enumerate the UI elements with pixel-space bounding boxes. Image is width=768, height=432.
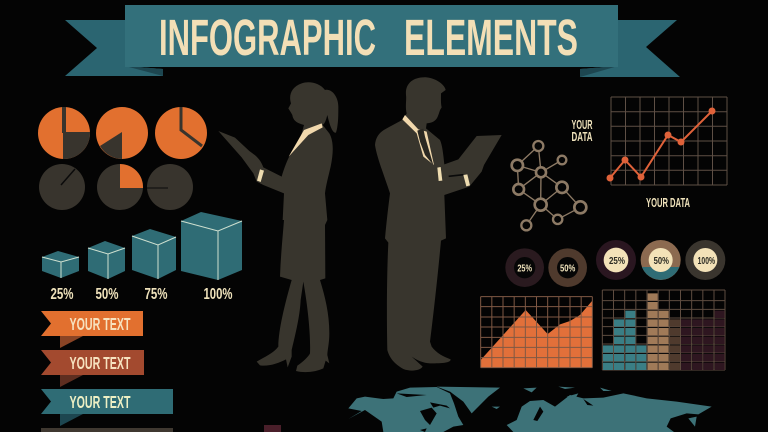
pie charts bbox=[38, 107, 207, 210]
y axis label: DATA bbox=[572, 129, 593, 144]
3D cubes bbox=[42, 212, 242, 303]
cube labels: 75% bbox=[144, 286, 168, 303]
Baltic sea bbox=[533, 399, 593, 421]
right banner fold bbox=[580, 66, 618, 77]
cube labels: 100% bbox=[204, 286, 232, 303]
man tie bbox=[417, 129, 433, 165]
man pen bbox=[449, 175, 463, 176]
left banner fold bbox=[125, 66, 163, 76]
right banner tail bbox=[580, 20, 680, 77]
x axis label: YOUR DATA bbox=[646, 196, 690, 210]
ribbon 2: YOUR TEXT bbox=[70, 353, 131, 373]
pie 5 bbox=[97, 164, 143, 210]
left banner tail bbox=[65, 20, 163, 76]
pie 4 bbox=[39, 164, 85, 210]
man silhouette bbox=[375, 77, 502, 371]
cube 100% bbox=[181, 212, 242, 280]
partial red square bbox=[264, 425, 281, 432]
cube 25% bbox=[42, 251, 79, 278]
donut 50% dark bbox=[548, 248, 587, 287]
silhouettes bbox=[218, 77, 502, 372]
title banner bbox=[65, 5, 680, 77]
area chart grid bbox=[481, 297, 592, 368]
bar chart grid bbox=[602, 290, 725, 370]
North America bbox=[348, 387, 463, 432]
donut 50% dark: 50% bbox=[560, 264, 575, 275]
line series bbox=[610, 111, 712, 178]
ribbon 1: YOUR TEXT bbox=[70, 314, 131, 334]
cube labels: 25% bbox=[50, 286, 74, 303]
area chart bbox=[481, 297, 592, 368]
title text: INFOGRAPHIC bbox=[159, 9, 376, 66]
cube labels: 50% bbox=[96, 286, 118, 303]
pie 6 bbox=[147, 164, 193, 210]
donut 25% light: 25% bbox=[609, 256, 625, 267]
ribbons bbox=[41, 311, 173, 432]
pie 2 bbox=[96, 107, 148, 159]
line chart grid bbox=[611, 97, 727, 185]
y axis label: YOUR bbox=[572, 117, 593, 132]
Eurasia bbox=[507, 393, 712, 432]
man cuffs bbox=[437, 167, 442, 181]
percentage donuts bbox=[505, 240, 725, 287]
donut 25% dark bbox=[505, 248, 544, 287]
woman collar bbox=[289, 123, 323, 157]
world map bbox=[348, 387, 712, 432]
area fill bbox=[481, 301, 592, 368]
woman silhouette bbox=[218, 82, 338, 372]
woman cuff bbox=[257, 169, 264, 182]
pie 1 bbox=[38, 107, 90, 159]
stacked bar chart bbox=[602, 290, 725, 370]
Greenland bbox=[437, 387, 500, 413]
donut 50% light bbox=[641, 240, 681, 280]
bar columns bbox=[608, 292, 720, 370]
donut 25% light bbox=[596, 240, 636, 280]
network diagram bbox=[512, 141, 586, 230]
pie 3 bbox=[155, 107, 207, 159]
banner body bbox=[125, 5, 618, 67]
cube labels bbox=[50, 286, 232, 303]
donut 25% dark: 25% bbox=[517, 264, 532, 275]
Arctic islands bbox=[492, 387, 697, 427]
donut 50% light: 50% bbox=[654, 256, 669, 267]
Hudson Bay and channels bbox=[397, 392, 467, 432]
cube 75% bbox=[132, 229, 176, 279]
donut 100% light: 100% bbox=[698, 256, 715, 267]
line chart bbox=[572, 97, 727, 210]
ribbon 4 bbox=[41, 428, 173, 432]
cube 50% bbox=[88, 241, 125, 279]
ribbon 3: YOUR TEXT bbox=[70, 392, 131, 412]
donut 100% light bbox=[685, 240, 725, 280]
man shirt collar bbox=[402, 115, 434, 165]
title text: ELEMENTS bbox=[404, 9, 578, 66]
